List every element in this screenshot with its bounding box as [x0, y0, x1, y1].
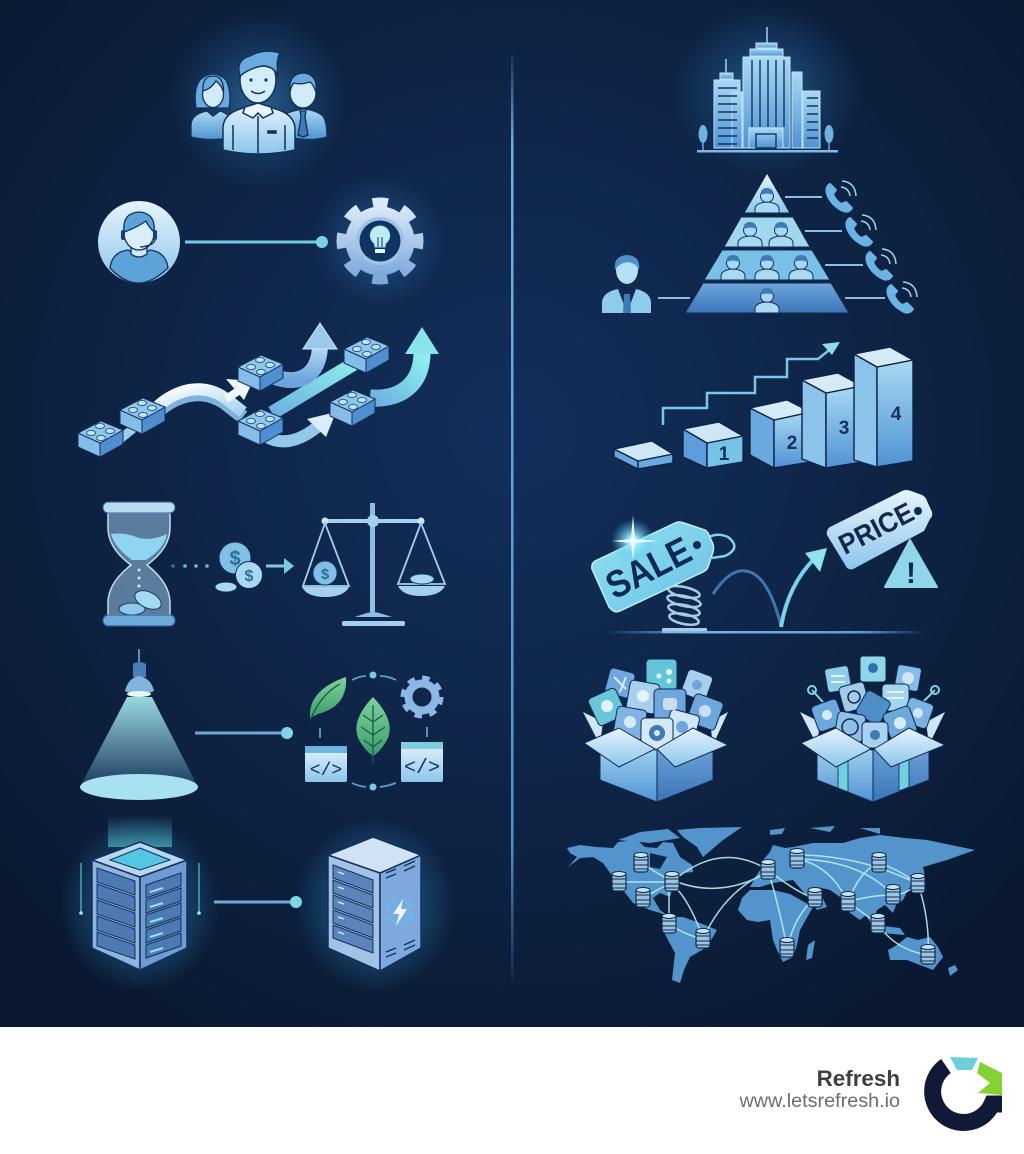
dotted path to coins	[171, 564, 209, 568]
icon: balance scale: $	[321, 566, 330, 583]
step numbers	[719, 404, 902, 465]
icon: price tag with warning: !	[906, 557, 916, 590]
icon: support agent avatar	[98, 201, 180, 283]
icon: spotlight lamp	[80, 649, 198, 800]
diagram: building-block paths with arrows	[78, 323, 439, 457]
small gear	[404, 679, 440, 715]
tag ring	[700, 535, 734, 558]
icon: sale tag on spring	[592, 515, 734, 633]
wires	[812, 690, 935, 712]
tier 1	[744, 173, 790, 213]
step 4	[854, 347, 913, 467]
icons: phones	[826, 181, 917, 313]
box faces	[600, 743, 657, 802]
pyramid level connectors	[658, 196, 885, 299]
database nodes	[612, 848, 935, 964]
footer brand text: Refresh	[817, 1066, 900, 1091]
icon: leaves, gear and code windows: </>	[310, 761, 342, 781]
footer brand text: www.letsrefresh.io	[738, 1090, 900, 1112]
hudson bay	[650, 853, 667, 869]
icon: price tag with warning: PRICE	[834, 496, 919, 560]
icon: gear with lightbulb	[314, 175, 446, 307]
arrow: blue up	[275, 323, 337, 380]
diagram: support pyramid	[685, 173, 849, 313]
cyan bar	[272, 360, 360, 413]
back flaps	[583, 712, 603, 745]
network arcs	[619, 855, 928, 955]
app tiles	[587, 659, 724, 750]
link between first bricks	[115, 424, 136, 445]
left code window	[305, 746, 347, 782]
icon: leaves, gear and code windows: </>	[404, 757, 440, 780]
icon: hourglass with coins	[103, 502, 175, 626]
step numbers: 2	[787, 433, 797, 454]
right code window	[401, 742, 443, 782]
icon: box overflowing with apps	[583, 659, 728, 802]
connector line: agent to gear	[185, 236, 328, 248]
step numbers: 3	[839, 418, 849, 439]
tier 3	[704, 250, 830, 280]
app tiles	[810, 656, 935, 748]
tier 2	[724, 217, 810, 247]
icon: office buildings	[672, 5, 862, 175]
tier 4	[685, 283, 849, 313]
arrow: teal up	[370, 327, 439, 398]
dashed orbit	[320, 676, 427, 787]
icon: team of three people	[170, 12, 346, 188]
step 2	[750, 400, 811, 468]
step 0	[614, 441, 673, 469]
arrow to scale	[266, 558, 294, 574]
central man	[223, 51, 295, 154]
icon: balance scale	[302, 503, 445, 626]
footer brand text	[738, 1066, 900, 1112]
icon: glowing server rack	[60, 815, 220, 993]
world map with data-centre links	[567, 826, 975, 983]
icon: price tag with warning	[827, 490, 937, 590]
chart: numbered growth steps	[614, 347, 913, 469]
icon: leaves, gear and code windows	[305, 672, 443, 790]
icon: dollar coins: $	[229, 548, 241, 570]
ground line	[605, 631, 925, 634]
small leaf	[310, 677, 346, 718]
icon: sale tag on spring: SALE	[599, 530, 699, 608]
icon: dollar coins	[215, 542, 262, 592]
sparkle	[611, 519, 655, 563]
step numbers: 4	[891, 404, 902, 425]
spring	[666, 584, 702, 627]
connector line: lamp to sustainable code	[195, 727, 293, 739]
step numbers: 1	[719, 444, 730, 465]
back flaps	[800, 712, 820, 745]
tag body	[592, 522, 714, 612]
bounce arrow	[713, 548, 827, 627]
icon: box of tangled apps	[800, 656, 945, 802]
arrow: low	[265, 412, 336, 441]
icon: efficient server with lightning bolt	[295, 817, 455, 993]
woman	[191, 74, 233, 140]
icon: dollar coins: $	[245, 568, 254, 585]
arrow: white s-curve	[158, 379, 253, 417]
central divider	[511, 55, 514, 980]
rising stair arrow	[663, 342, 840, 425]
man with tie	[287, 73, 327, 140]
footer band	[0, 1027, 1024, 1154]
step 1	[683, 422, 743, 468]
box faces	[817, 743, 873, 802]
connector line: servers	[214, 896, 302, 908]
continents	[567, 826, 975, 983]
central leaf	[356, 697, 390, 756]
step 3	[802, 373, 862, 468]
logo: Refresh mark	[933, 1050, 1024, 1130]
icon: businessman	[602, 255, 651, 313]
